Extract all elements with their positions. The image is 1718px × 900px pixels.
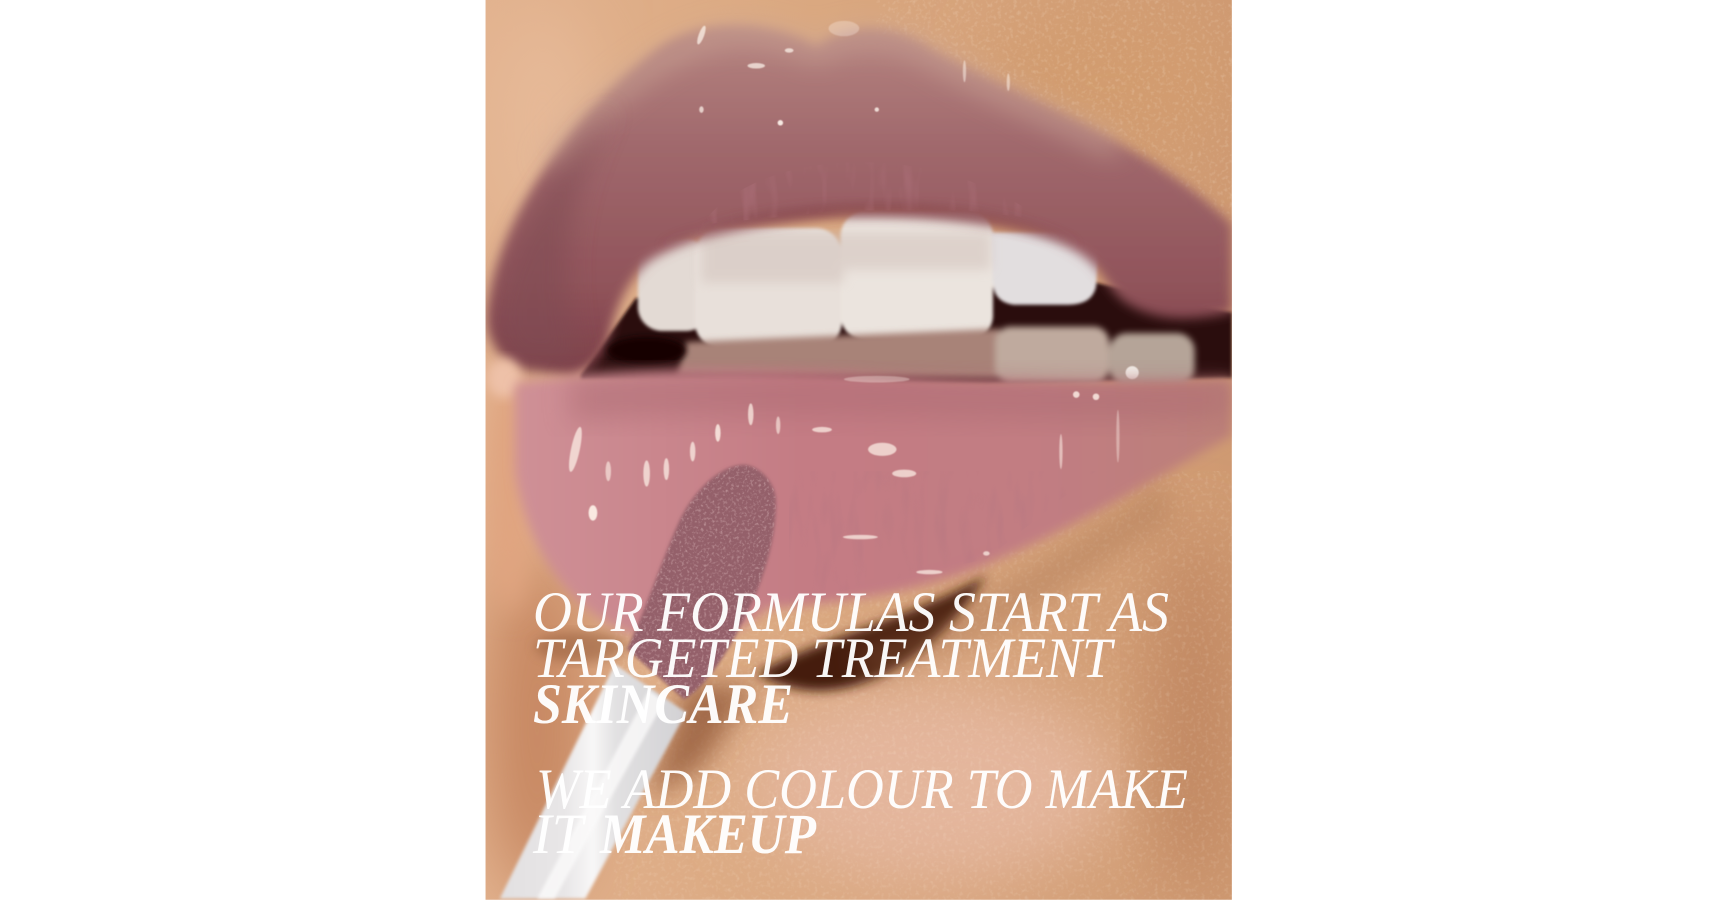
dark interior of mouth <box>581 283 1232 384</box>
wand cast shadow <box>647 685 756 800</box>
lower lip <box>515 370 1232 642</box>
infographic canvas <box>486 0 1232 900</box>
line: makeup: MAKEUP <box>599 803 817 866</box>
gloss highlights <box>566 376 1120 574</box>
skin base <box>486 0 1232 900</box>
lower lip upper shade <box>570 374 1232 422</box>
applicator wand <box>500 664 686 899</box>
upper lip rim gloss <box>695 21 1010 125</box>
lip skin corner highlight <box>487 358 522 398</box>
wand highlight stripe <box>537 690 664 899</box>
upper teeth <box>638 212 1100 349</box>
upper lip rim shadow <box>486 127 596 378</box>
skin speckle upper right <box>877 0 1232 219</box>
upper lip creases <box>744 182 909 220</box>
line: it: IT <box>532 803 587 866</box>
lower lip creases <box>789 471 1096 603</box>
skin speckle chin <box>614 471 1232 900</box>
shadow left of sponge <box>535 631 627 662</box>
line: we add colour to make: WE ADD COLOUR TO MAKE <box>536 758 1188 821</box>
tooth top shading <box>701 232 991 283</box>
applicator sponge <box>627 465 776 699</box>
line: our formulas start as: OUR FORMULAS START AS <box>533 581 1169 644</box>
headline text <box>532 581 1188 866</box>
brown cast along lip edge <box>855 482 1173 685</box>
lower teeth <box>677 327 1195 386</box>
photo: lips with applicator <box>486 0 1232 900</box>
upper lip pale rim <box>548 33 1118 164</box>
tooth glint <box>1126 366 1139 379</box>
line: targeted treatment: TARGETED TREATMENT <box>533 627 1116 690</box>
upper lip dark band above teeth <box>726 202 1067 246</box>
upper lip <box>488 26 1232 375</box>
line: skincare: SKINCARE <box>533 673 793 736</box>
skin tone patches <box>486 5 1232 899</box>
lip corner shadow <box>607 336 686 365</box>
shadow beneath lower lip <box>756 575 986 691</box>
